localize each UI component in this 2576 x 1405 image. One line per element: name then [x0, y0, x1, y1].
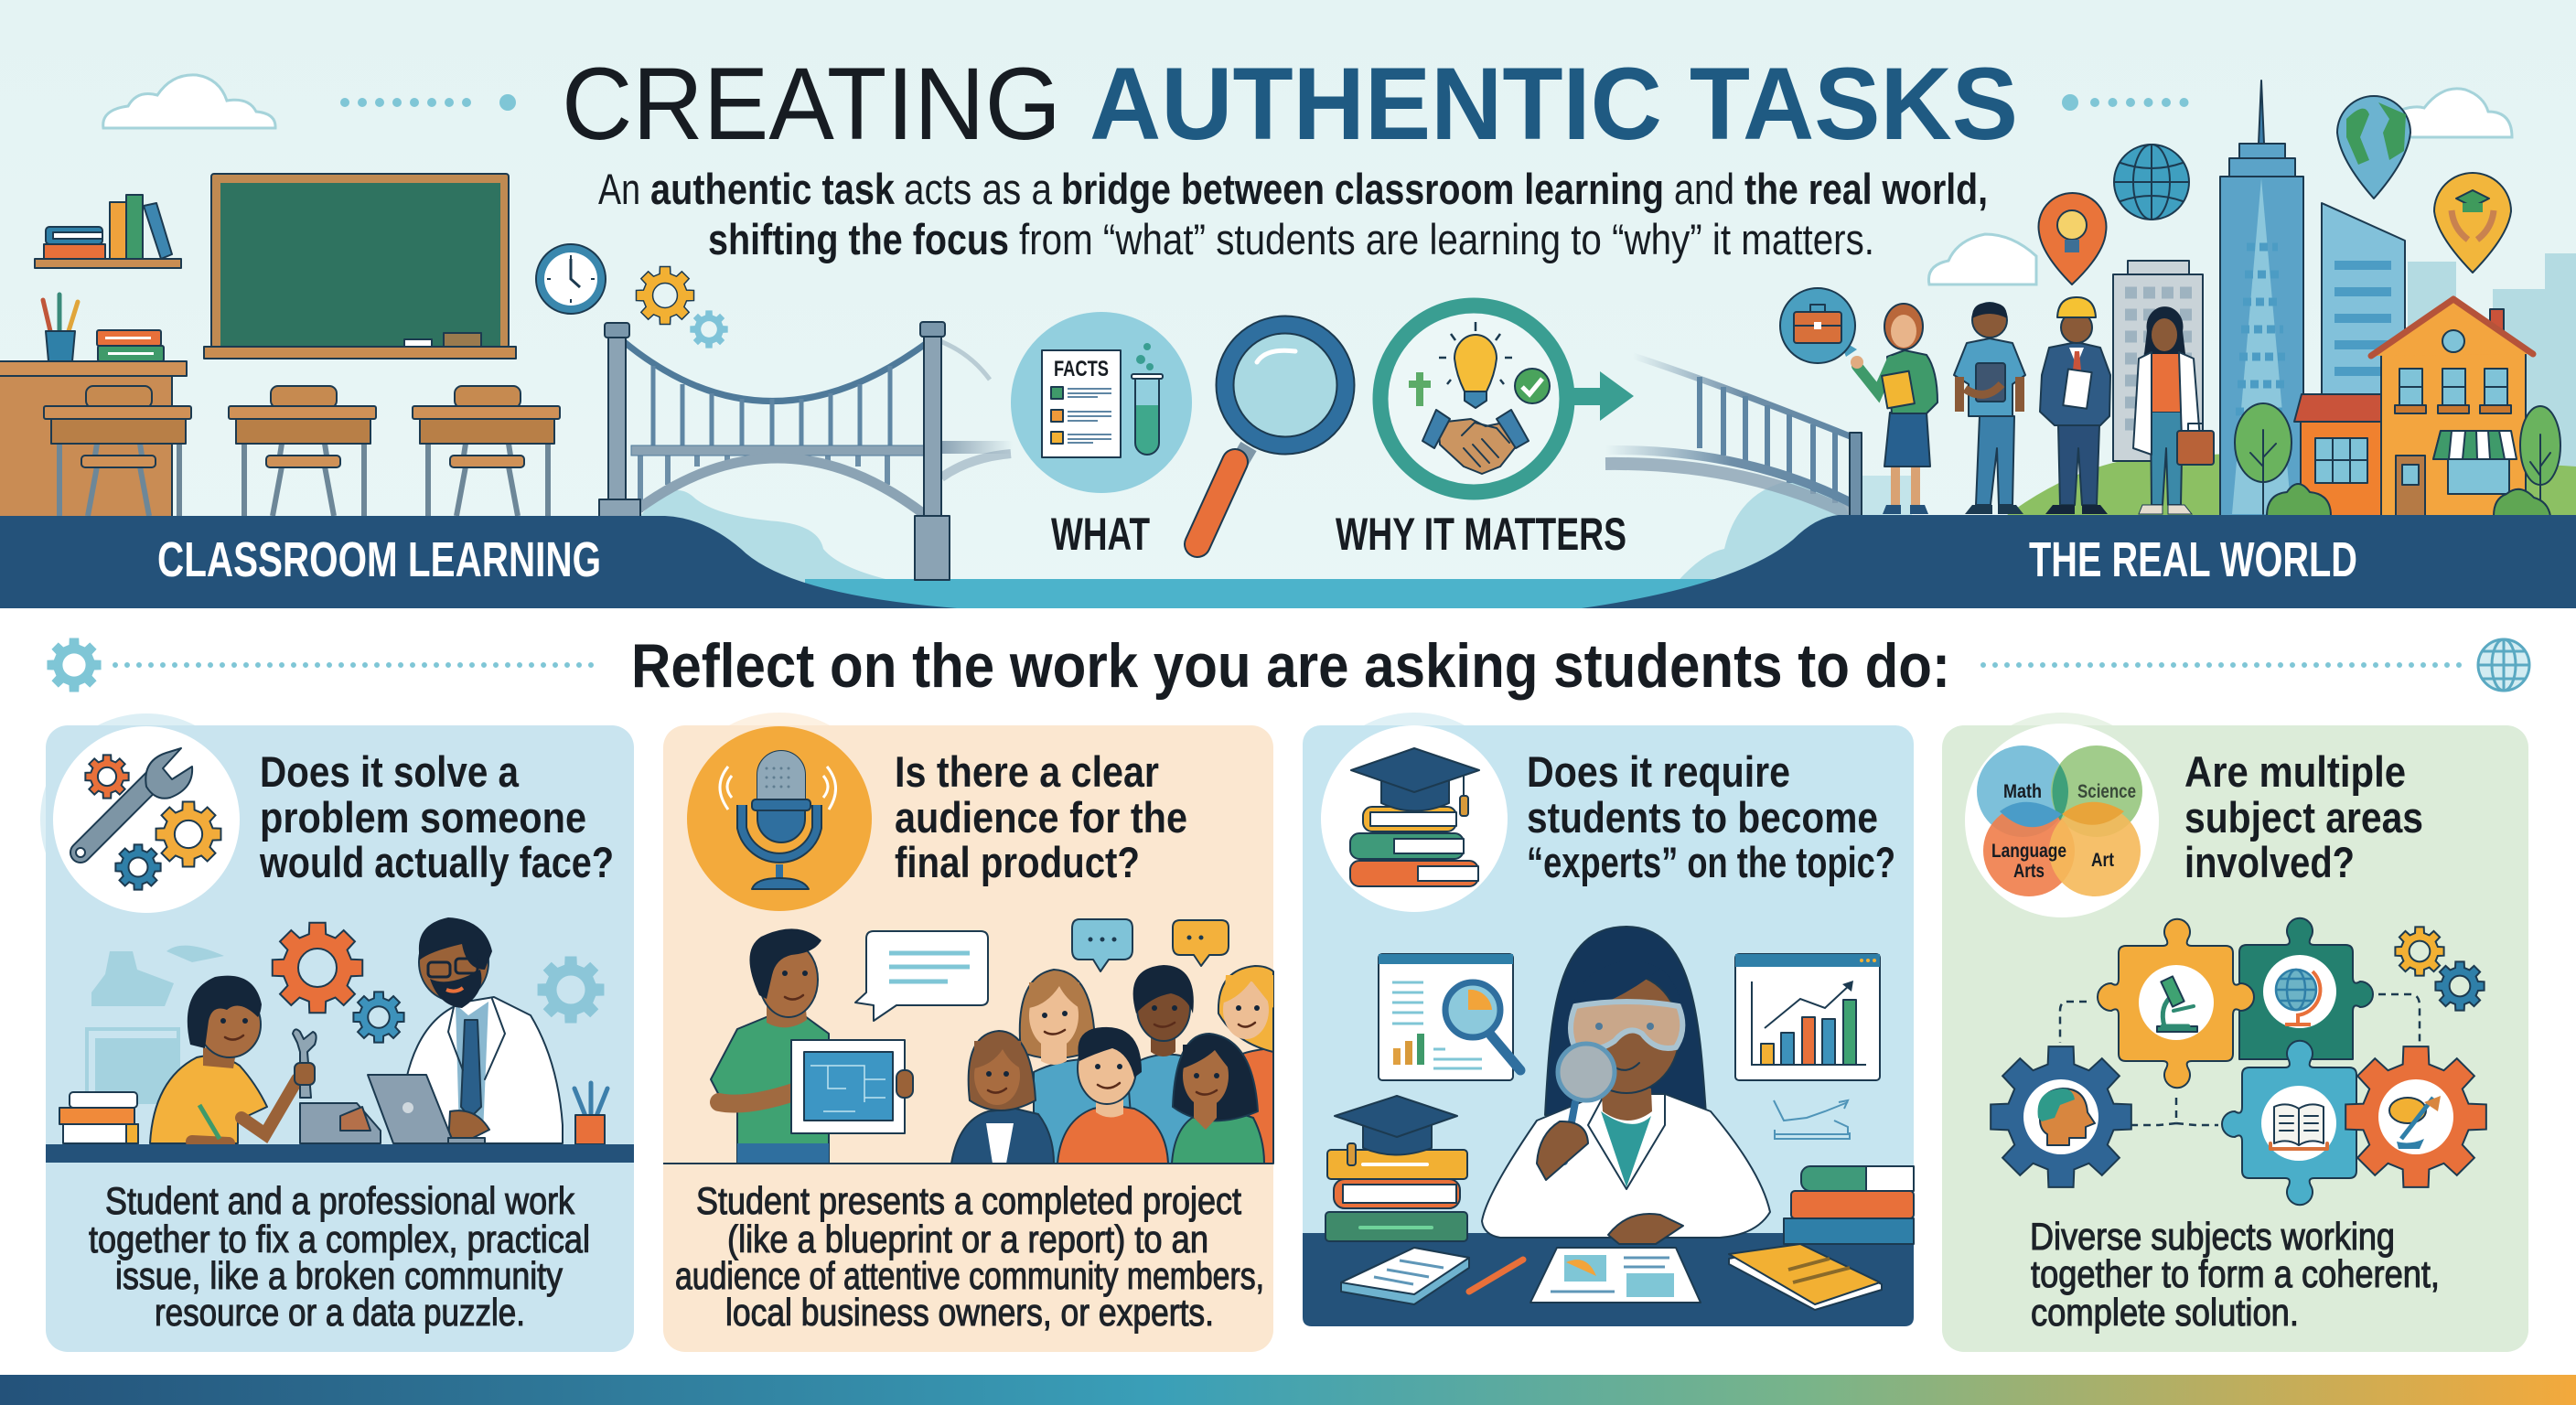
books right — [1784, 1166, 1914, 1244]
question: problem someone — [260, 793, 586, 842]
question: Does it solve a — [260, 747, 520, 796]
title: CREATING — [562, 47, 1061, 161]
blue bubble — [1072, 919, 1132, 971]
trees and bushes — [2235, 403, 2560, 516]
dashed connectors — [2060, 994, 2420, 1125]
icon: microphone — [687, 726, 872, 911]
question: audience for the — [895, 793, 1187, 842]
panel: real problem — [40, 713, 634, 1352]
title: AUTHENTIC TASKS — [1089, 47, 2018, 161]
icon: venn diagram: Language — [1991, 841, 2066, 862]
heading text: Reflect on the work you are asking students to do: — [631, 631, 1950, 701]
panel: clear audience — [663, 713, 1273, 1352]
student desks — [44, 386, 560, 516]
description: local business owners, or experts. — [725, 1291, 1214, 1334]
question — [1527, 747, 1895, 886]
description: Student presents a completed project — [696, 1179, 1241, 1222]
globe — [2114, 145, 2189, 220]
question: final product? — [895, 838, 1140, 886]
description: audience of attentive community members, — [675, 1254, 1264, 1297]
illustration: puzzle and gears — [1991, 918, 2486, 1205]
icon: venn diagram: Arts — [2013, 861, 2045, 882]
label: classroom learning: CLASSROOM LEARNING — [157, 532, 601, 587]
word: why it matters: WHY IT MATTERS — [1336, 509, 1626, 560]
description — [89, 1179, 590, 1334]
glass tower right — [2322, 203, 2405, 402]
description: Student and a professional work — [105, 1179, 575, 1222]
description: together to form a coherent, — [2031, 1252, 2440, 1295]
what circle — [1011, 312, 1192, 493]
audience front row — [951, 1109, 1054, 1164]
pencil cup and books on teacher desk — [43, 295, 164, 361]
description — [2030, 1215, 2440, 1334]
question: Are multiple — [2184, 747, 2406, 796]
person: man with clipboard — [1954, 303, 2025, 514]
facts sheet — [1042, 350, 1121, 457]
title — [562, 47, 2018, 161]
question: Is there a clear — [895, 747, 1159, 796]
chalkboard — [204, 174, 516, 359]
subtitle: authentic task — [650, 165, 896, 213]
puzzle blue — [2222, 1041, 2356, 1205]
ground left — [0, 516, 957, 608]
skyline background — [2408, 253, 2576, 519]
pin: graduation hands — [2434, 173, 2511, 273]
pencil cup — [574, 1083, 607, 1144]
panel: multiple subjects — [1942, 713, 2528, 1352]
subtitle: acts as a — [904, 165, 1053, 213]
student boy — [150, 976, 317, 1143]
skyscraper — [2220, 80, 2303, 516]
subtitle — [598, 165, 1988, 263]
question: would actually face? — [259, 838, 614, 886]
description: together to fix a complex, practical — [89, 1217, 590, 1260]
icon: books and cap — [1321, 725, 1508, 912]
main house — [2371, 299, 2533, 516]
question: involved? — [2184, 838, 2355, 886]
puzzle yellow — [2098, 919, 2254, 1088]
screen: bar chart — [1735, 954, 1880, 1080]
desk papers and pencil — [1341, 1244, 1882, 1310]
faint chart sketch — [1774, 1100, 1850, 1139]
person: woman in green — [1851, 304, 1937, 514]
title dots right — [2062, 94, 2188, 111]
audience — [951, 965, 1273, 1164]
small gears — [2395, 927, 2444, 976]
description — [675, 1179, 1264, 1334]
cloud right — [2399, 89, 2512, 137]
test tube — [1132, 343, 1163, 455]
icon: venn diagram: Art — [2091, 850, 2114, 871]
title dots left — [345, 94, 516, 111]
description: Diverse subjects working — [2030, 1215, 2395, 1258]
description: resource or a data puzzle. — [155, 1291, 525, 1334]
researcher — [1482, 927, 1770, 1244]
light bulb — [1439, 322, 1512, 408]
audience back row — [1226, 1048, 1273, 1164]
gear orange — [2345, 1046, 2486, 1187]
question — [895, 747, 1187, 886]
grey building — [2113, 261, 2203, 461]
gears near clock — [636, 266, 728, 349]
icon: wrench and gears — [53, 726, 240, 913]
speech bubble — [855, 931, 988, 1021]
subtitle: bridge between classroom learning — [1061, 165, 1664, 213]
ground right — [1582, 515, 2576, 608]
description: complete solution. — [2031, 1291, 2299, 1334]
description: issue, like a broken community — [115, 1254, 563, 1297]
icon: gear — [47, 638, 102, 692]
person: engineer in suit — [2040, 297, 2110, 514]
desk bar — [46, 1144, 634, 1163]
shelf with books — [35, 195, 181, 268]
why circle and arrow — [1380, 306, 1634, 492]
water hills — [640, 476, 1912, 585]
illustration: presenter and audience — [711, 919, 1273, 1164]
bottom gradient bar — [0, 1375, 2576, 1405]
device — [300, 1103, 381, 1143]
orange bubble — [1173, 920, 1229, 966]
person: scientist with briefcase — [2133, 306, 2214, 514]
bridge tower far — [915, 322, 950, 580]
icon: globe — [2478, 639, 2529, 691]
cloud middle — [1928, 234, 2036, 284]
bridge left — [599, 322, 1013, 580]
background silhouettes — [87, 946, 224, 1102]
magnifying glass — [1197, 316, 1354, 544]
side house — [2294, 394, 2381, 516]
subtitle: and — [1674, 165, 1734, 213]
screen: data report — [1379, 954, 1520, 1080]
books — [59, 1092, 138, 1143]
question: “experts” on the topic? — [1527, 838, 1895, 886]
green hill — [2003, 454, 2576, 518]
bridge tower near — [599, 323, 640, 518]
teacher desk — [0, 361, 187, 518]
icon: venn diagram — [1965, 724, 2159, 917]
pin: light bulb — [2038, 193, 2106, 284]
description: (like a blueprint or a report) to an — [727, 1217, 1208, 1260]
subtitle: shifting the focus — [708, 215, 1009, 263]
facts sheet: FACTS — [1054, 357, 1109, 381]
question — [2184, 747, 2423, 886]
subtitle: An — [598, 165, 640, 213]
handshake — [1422, 410, 1529, 474]
question: subject areas — [2184, 793, 2423, 842]
cloud left — [103, 75, 275, 128]
puzzle teal — [2239, 918, 2373, 1059]
gear navy — [1991, 1046, 2131, 1187]
laptop — [368, 1075, 485, 1143]
word: what: WHAT — [1051, 509, 1150, 560]
top banner — [0, 0, 2576, 608]
bubble: briefcase — [1780, 288, 1857, 363]
pin: earth — [2337, 96, 2410, 198]
floor line — [663, 1163, 1273, 1164]
label: the real world: THE REAL WORLD — [2029, 532, 2357, 587]
subtitle: from “what” students are learning to “why” it matters. — [1019, 215, 1874, 263]
panel: become experts — [1303, 713, 1914, 1326]
water — [805, 579, 1775, 608]
presenter — [711, 928, 913, 1164]
professional — [395, 917, 563, 1143]
icon: venn diagram: Science — [2077, 781, 2136, 802]
bridge right — [1605, 356, 1862, 518]
subtitle: the real world, — [1744, 165, 1988, 213]
plus sign — [1409, 372, 1431, 406]
books left with cap — [1326, 1096, 1467, 1241]
icon: venn diagram: Math — [2003, 781, 2042, 802]
section heading — [47, 631, 2529, 701]
question: Does it require — [1527, 747, 1790, 796]
illustration: student and professional — [59, 917, 607, 1144]
illustration: student researcher — [1326, 927, 1914, 1310]
question — [259, 747, 614, 886]
desk surface — [1303, 1233, 1914, 1326]
check mark — [1515, 369, 1550, 403]
wall clock — [536, 244, 606, 314]
question: students to become — [1527, 793, 1878, 842]
